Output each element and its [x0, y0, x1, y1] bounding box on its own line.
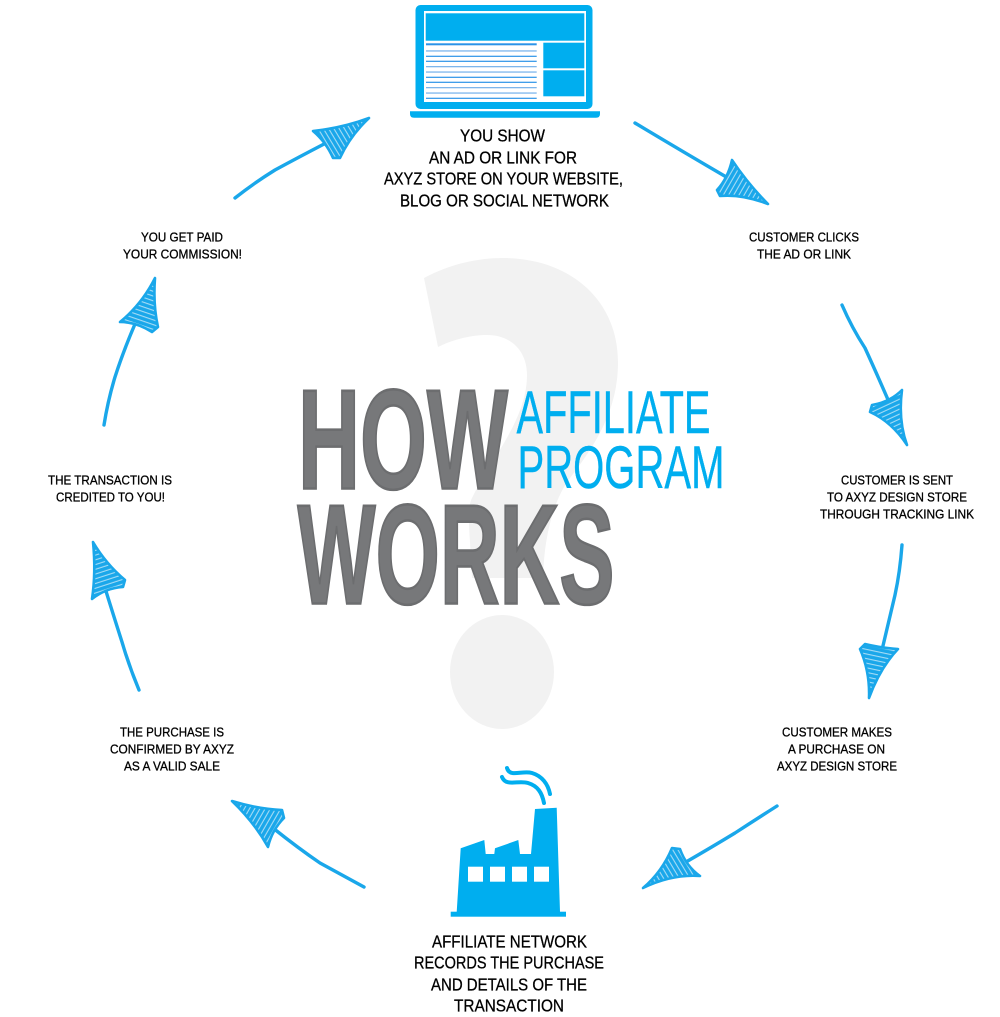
arrow: left lower — [92, 542, 139, 690]
text: customer clicks — [749, 230, 859, 262]
text: customer is sent: THROUGH TRACKING LINK — [820, 506, 974, 522]
text: customer is sent — [820, 472, 974, 522]
text: you show an ad: BLOG OR SOCIAL NETWORK — [400, 190, 609, 210]
text: affiliate network records: AFFILIATE NETWORK — [432, 932, 587, 952]
text: customer makes a purchase: A PURCHASE ON — [788, 742, 885, 756]
text: purchase is confirmed: CONFIRMED BY AXYZ — [110, 742, 234, 756]
icon: laptop with web page — [410, 5, 600, 118]
arrow: bottom left — [232, 801, 364, 887]
title: HOW WORKS — [298, 360, 614, 634]
text: you get paid: YOUR COMMISSION! — [123, 246, 242, 262]
text: transaction is credited: THE TRANSACTION IS — [48, 472, 172, 488]
text: transaction is credited — [48, 472, 172, 504]
text: you get paid — [123, 230, 242, 262]
subtitle: AFFILIATE PROGRAM — [516, 379, 724, 501]
arrow: top left — [235, 118, 369, 198]
arrow: right upper — [842, 305, 907, 445]
subtitle: AFFILIATE PROGRAM: PROGRAM — [518, 434, 724, 501]
text: customer makes a purchase: AXYZ DESIGN STORE — [777, 758, 897, 774]
title: HOW WORKS: HOW — [298, 360, 508, 520]
text: customer clicks: CUSTOMER CLICKS — [749, 230, 859, 244]
text: affiliate network records: TRANSACTION — [454, 996, 564, 1016]
background question mark — [424, 258, 618, 729]
arrow: bottom right — [643, 806, 777, 888]
arrow: right lower — [860, 545, 902, 698]
text: transaction is credited: CREDITED TO YOU! — [56, 490, 165, 504]
text: customer makes a purchase — [777, 724, 897, 774]
text: customer is sent: TO AXYZ DESIGN STORE — [827, 490, 967, 504]
text: affiliate network records: RECORDS THE PURCHASE — [414, 952, 604, 972]
text: customer makes a purchase: CUSTOMER MAKES — [782, 724, 892, 740]
text: customer is sent: CUSTOMER IS SENT — [841, 472, 953, 488]
text: purchase is confirmed: AS A VALID SALE — [124, 758, 220, 774]
text: customer clicks: THE AD OR LINK — [757, 246, 851, 262]
title: HOW WORKS: WORKS — [298, 476, 614, 634]
arrow: top right — [635, 123, 768, 204]
text: affiliate network records: AND DETAILS OF THE — [431, 974, 587, 994]
arrow: left upper — [104, 278, 158, 425]
text: you show an ad: AXYZ STORE ON YOUR WEBSITE, — [384, 168, 623, 188]
text: you show an ad — [384, 126, 623, 210]
text: purchase is confirmed: THE PURCHASE IS — [120, 724, 224, 740]
text: you get paid: YOU GET PAID — [141, 230, 223, 244]
icon: factory — [451, 768, 566, 917]
text: you show an ad: AN AD OR LINK FOR — [429, 148, 577, 168]
text: affiliate network records — [414, 932, 604, 1016]
text: purchase is confirmed — [110, 724, 234, 774]
text: you show an ad: YOU SHOW — [460, 126, 545, 146]
subtitle: AFFILIATE PROGRAM: AFFILIATE — [516, 379, 710, 446]
